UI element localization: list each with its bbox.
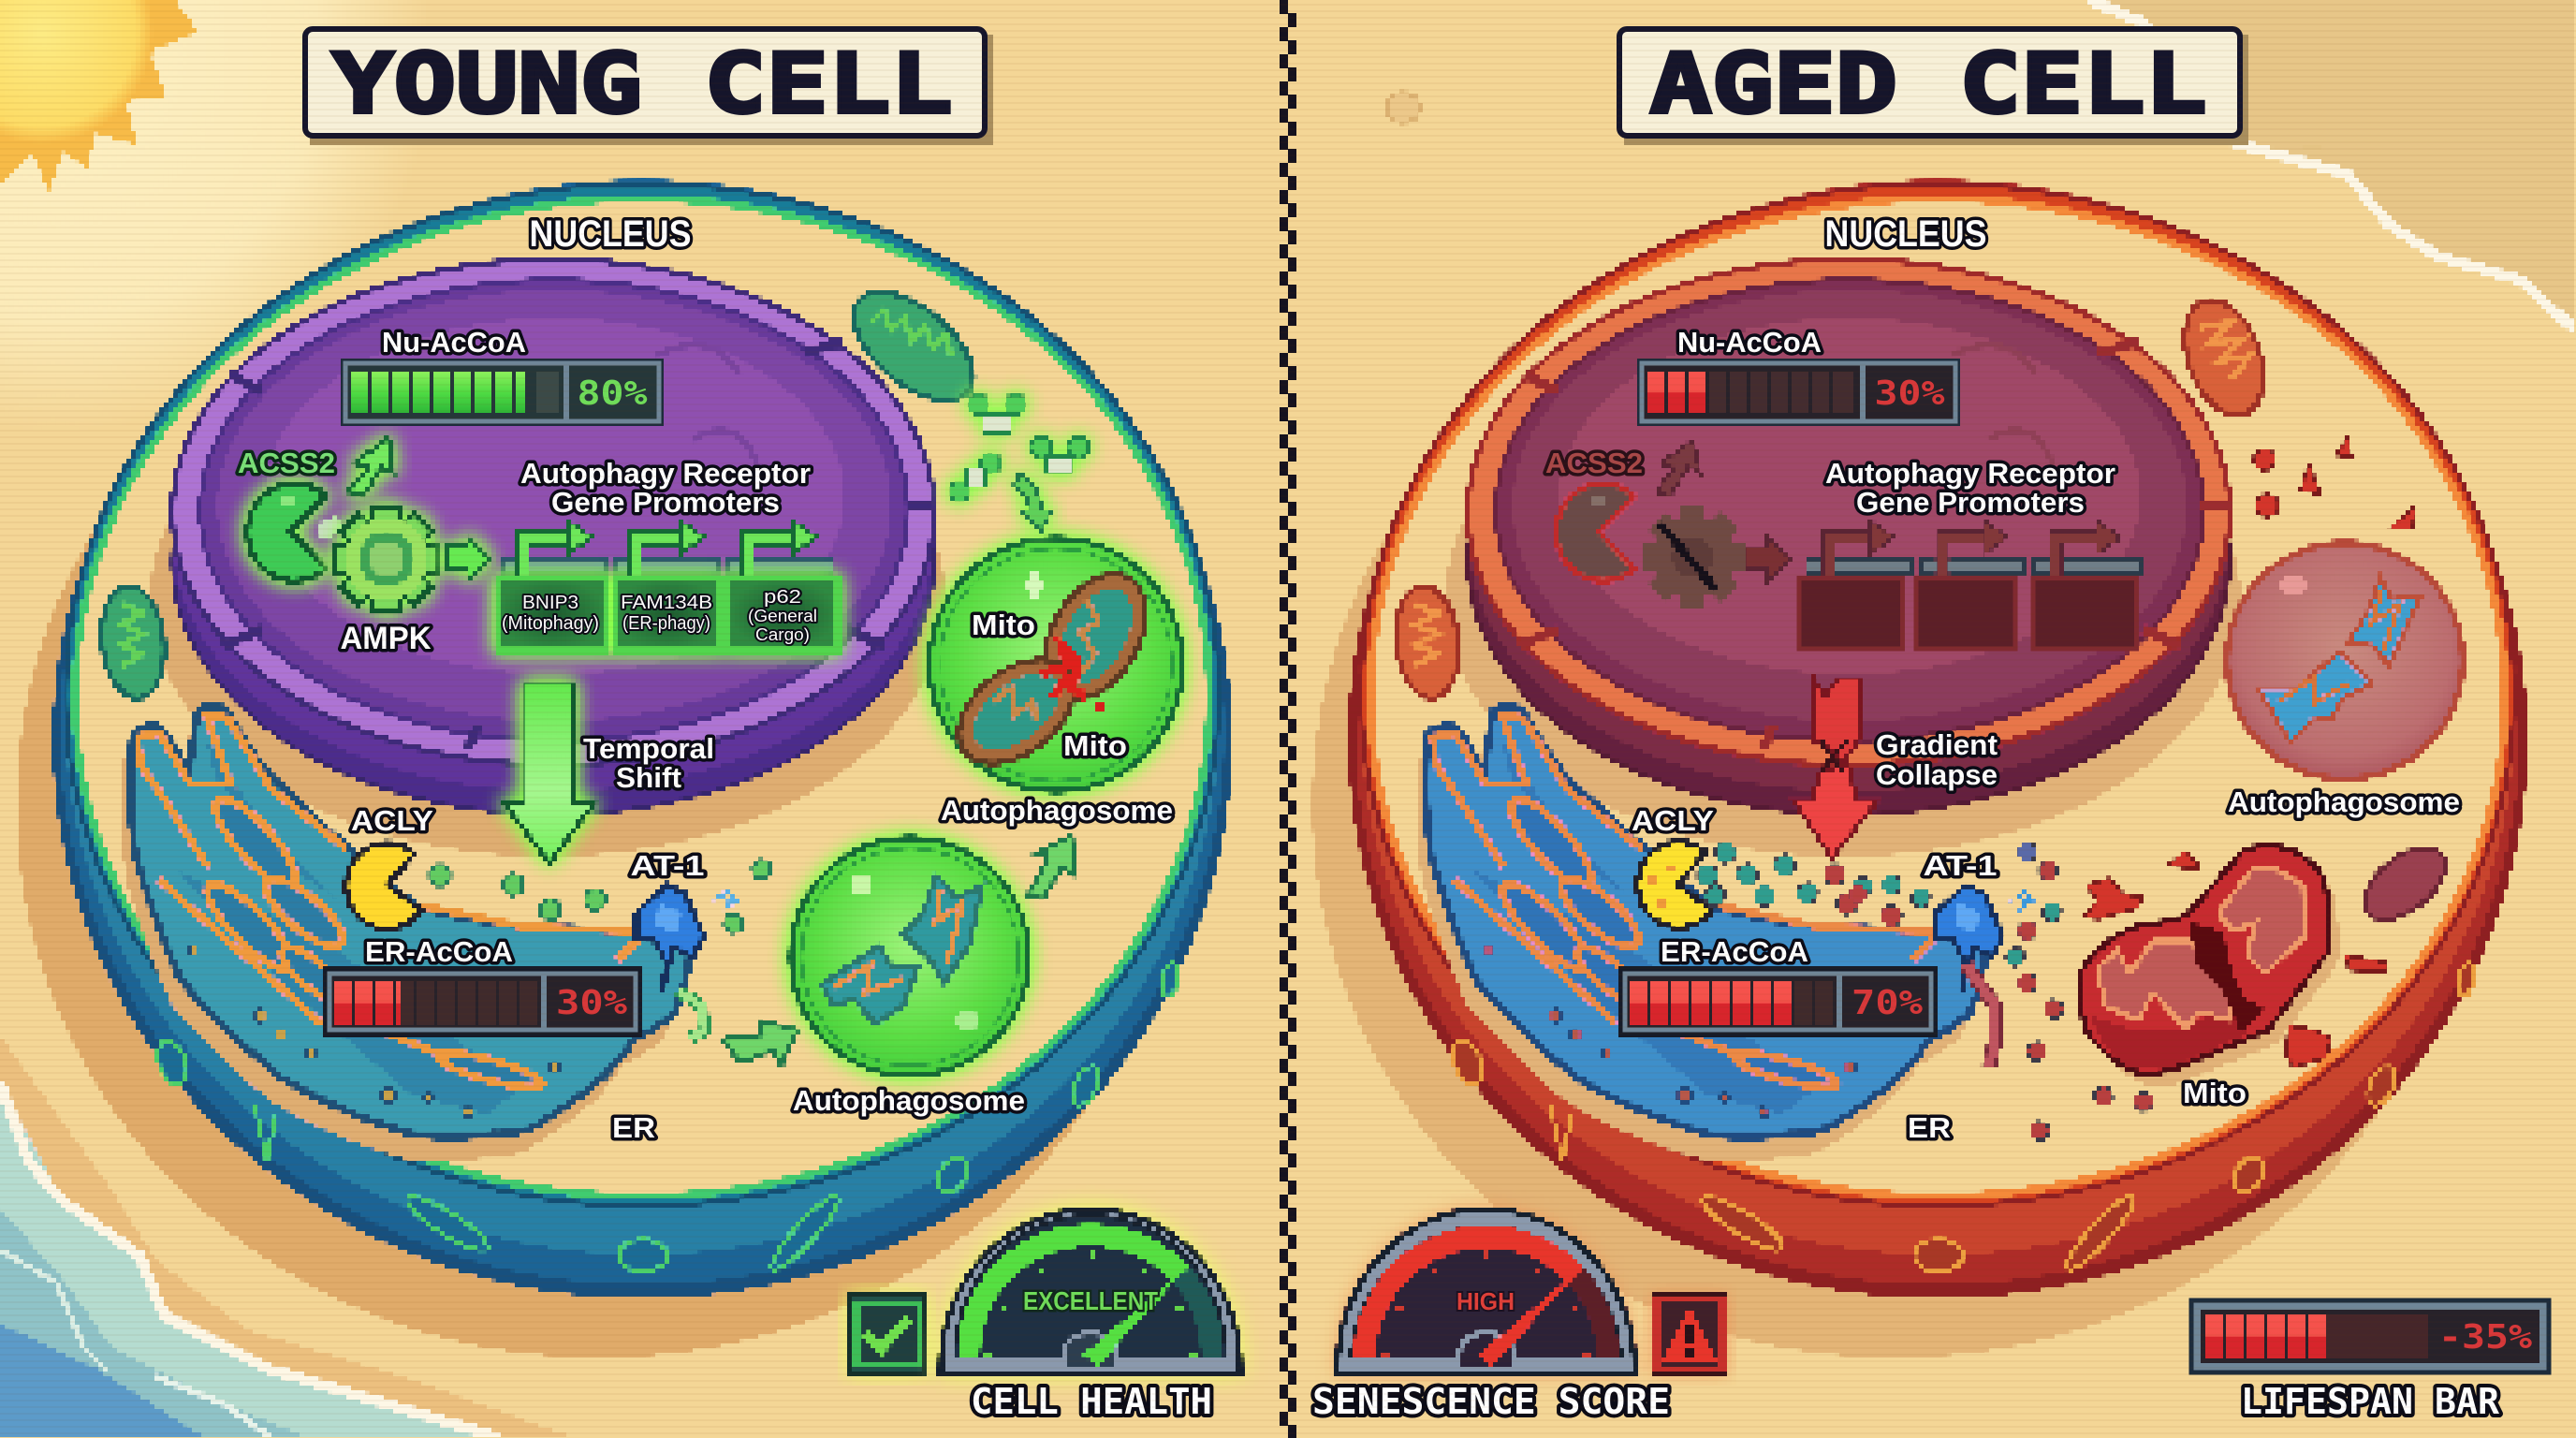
label: AT-1: AT-1 (1923, 849, 1998, 882)
aged cell shared geometry (1312, 180, 2527, 1357)
label: Autophagy Receptor Gene Promoters: Gene Promoters (551, 486, 780, 519)
label: AMPK: AMPK (341, 621, 432, 656)
label: AT-1: AT-1 (631, 849, 704, 882)
cell health check box (849, 1295, 926, 1373)
red tail from AT-1 (1966, 964, 1996, 1067)
tile text: BNIP3 (502, 593, 599, 634)
label: Autophagy Receptor Gene Promoters (520, 457, 811, 519)
autophagosome pale sphere (2227, 543, 2463, 779)
nucleus (1468, 259, 2233, 814)
icon: sun (0, 0, 198, 192)
promoter bent arrows (522, 521, 817, 576)
gauge text: EXCELLENT: EXCELLENT (1023, 1286, 1158, 1315)
gauge text: HIGH: HIGH (1456, 1287, 1515, 1315)
nucleus shadow (1445, 342, 2241, 857)
cell wall (52, 180, 1232, 1299)
broken arrow: gradient collapse (1793, 679, 1878, 858)
scattered AcCoA molecules (1697, 843, 2153, 1140)
icon: ACLY yellow pac-man (346, 843, 421, 929)
dark promoter tiles (1797, 559, 2140, 651)
label: Temporal Shift (583, 732, 714, 794)
label: Autophagy Receptor Gene Promoters: Gene Promoters (1856, 486, 2085, 519)
readout: 30%: 30% (556, 984, 627, 1022)
decayed small mitochondrion (2351, 834, 2458, 933)
label: ER: ER (1908, 1111, 1951, 1144)
label: Autophagy Receptor Gene Promoters: Autophagy Receptor (1825, 457, 2115, 490)
tile text: p62: (General (748, 607, 817, 625)
membrane organelles (1448, 962, 2476, 1276)
icon: arrow to upper autophagosome (1027, 835, 1075, 899)
big mitochondrion (2079, 846, 2339, 1086)
readout: -35%: -35% (2438, 1318, 2532, 1357)
tile text: FAM134B (621, 593, 712, 634)
young cell artwork (17, 180, 1240, 1373)
title: YOUNG CELL: YOUNG CELL (331, 36, 953, 132)
Nu-AcCoA bar (1637, 359, 1960, 426)
icon: AT-1 transporter (1936, 885, 2035, 992)
green molecules outside (949, 394, 1089, 502)
label: Nu-AcCoA: Nu-AcCoA (382, 326, 526, 359)
readout: 30%: 30% (1874, 374, 1945, 413)
promoter dim arrows (1829, 521, 2121, 576)
label: ER-AcCoA: ER-AcCoA (1661, 935, 1808, 968)
label: LIFESPAN BAR: LIFESPAN BAR (2241, 1381, 2499, 1422)
membrane organelles (153, 962, 1180, 1276)
label: NUCLEUS: NUCLEUS (1825, 213, 1986, 255)
endoplasmic reticulum (130, 706, 690, 1137)
readout: 80%: 80% (577, 374, 648, 413)
label: Autophagosome lower: Autophagosome (793, 1084, 1025, 1117)
aged cell artwork (1312, 180, 2527, 1373)
small mitochondria (96, 272, 992, 701)
ER shadow (1416, 730, 1976, 1161)
green AcCoA molecules (430, 860, 771, 932)
label: Mito: Mito (2183, 1077, 2247, 1109)
cell wall (1348, 180, 2527, 1299)
title: AGED CELL: AGED CELL (1649, 36, 2207, 132)
label: Gradient Collapse (1876, 728, 1998, 791)
label: Mito lower: Mito (1063, 729, 1127, 762)
icon: AMPK broken gear (1641, 506, 1744, 609)
icon: curved arrow down to autophagosome (1015, 473, 1052, 531)
tile text: FAM134B: FAM134B (621, 593, 712, 613)
autophagosome sphere lower (791, 838, 1029, 1076)
icon: dim arrow (1747, 536, 1792, 582)
ER-AcCoA bar (323, 966, 642, 1037)
panel: aged cell (1312, 180, 2549, 1422)
Nu-AcCoA bar (341, 359, 664, 426)
big arrow: temporal shift (504, 683, 594, 863)
icon: arrow AMPK to promoters (447, 536, 490, 580)
tile text: p62 (748, 587, 817, 644)
green fragment from AT-1 (679, 990, 704, 1039)
cell shadow on sand (1312, 253, 2477, 1357)
divider between young and aged (1280, 0, 1296, 1438)
icon: ACSS2 faded up arrow (1656, 440, 1700, 496)
small mitochondria (1391, 289, 2278, 701)
label: Gradient Collapse: Collapse (1876, 758, 1998, 791)
sea (0, 1081, 501, 1438)
label: ER-AcCoA: ER-AcCoA (365, 935, 513, 968)
label: ACSS2 faded: ACSS2 (1545, 447, 1643, 479)
gene promoter tiles (497, 559, 838, 651)
label: Nu-AcCoA: Nu-AcCoA (1677, 326, 1822, 359)
tile text: FAM134B: (ER-phagy) (622, 613, 710, 634)
tile text: p62: p62 (764, 587, 801, 608)
cell membrane ring and cytoplasm floor (1361, 183, 2514, 1206)
label: Gradient Collapse: Gradient (1876, 728, 1998, 761)
cell shadow on sand (17, 253, 1181, 1357)
label: ER: ER (612, 1111, 655, 1144)
readout: 70%: 70% (1852, 984, 1923, 1022)
label: Temporal Shift: Shift (616, 761, 681, 794)
label: SENESCENCE SCORE: SENESCENCE SCORE (1312, 1381, 1670, 1422)
label: NUCLEUS: NUCLEUS (530, 213, 691, 255)
label: Temporal Shift: Temporal (583, 732, 714, 765)
icon: ACSS2 faded pac-man (1556, 483, 1634, 581)
panel: young cell (17, 180, 1240, 1422)
warning box (1652, 1295, 1727, 1373)
icon: ACLY yellow pac-man with damage (1637, 842, 1712, 928)
tile text: p62: Cargo) (755, 625, 810, 644)
label: ACSS2: ACSS2 (238, 447, 335, 479)
ER shadow (121, 730, 681, 1161)
senescence gauge (1338, 1209, 1634, 1372)
icon: ACSS2 pac-man enzyme (247, 483, 326, 581)
label: Mito in autophagosome: Mito (972, 609, 1035, 641)
ER-AcCoA bar (1618, 966, 1938, 1037)
icon: AMPK gear (335, 507, 438, 610)
label: Autophagy Receptor Gene Promoters (1825, 457, 2115, 519)
cell membrane ring and cytoplasm floor (66, 183, 1219, 1206)
title: AGED CELL (1619, 29, 2248, 145)
endoplasmic reticulum (1426, 706, 1985, 1137)
tile text: BNIP3: (Mitophagy) (502, 613, 599, 634)
red debris fragments (2086, 436, 2415, 1067)
icon: AT-1 transporter (637, 885, 739, 992)
label: Autophagosome upper: Autophagosome (941, 794, 1173, 827)
title: YOUNG CELL (305, 29, 993, 145)
nucleus (172, 259, 938, 814)
label: ACLY: ACLY (1632, 804, 1714, 837)
autophagosome with damaged mitochondrion (929, 538, 1182, 791)
wet sand top right (2089, 0, 2576, 330)
nucleus shadow (150, 342, 945, 857)
label: Autophagosome: Autophagosome (2228, 785, 2460, 818)
icon: ACSS2 up arrow (348, 438, 393, 496)
label: ACLY: ACLY (351, 804, 433, 837)
icon: green arrow toward autophagosome (724, 1020, 798, 1065)
lifespan bar (2191, 1300, 2549, 1372)
label: Autophagy Receptor Gene Promoters: Autophagy Receptor (520, 457, 811, 490)
wet sand bottom left (0, 1035, 575, 1438)
tile text: BNIP3: BNIP3 (522, 593, 578, 613)
label: CELL HEALTH: CELL HEALTH (971, 1381, 1212, 1422)
cell health gauge (941, 1210, 1240, 1372)
